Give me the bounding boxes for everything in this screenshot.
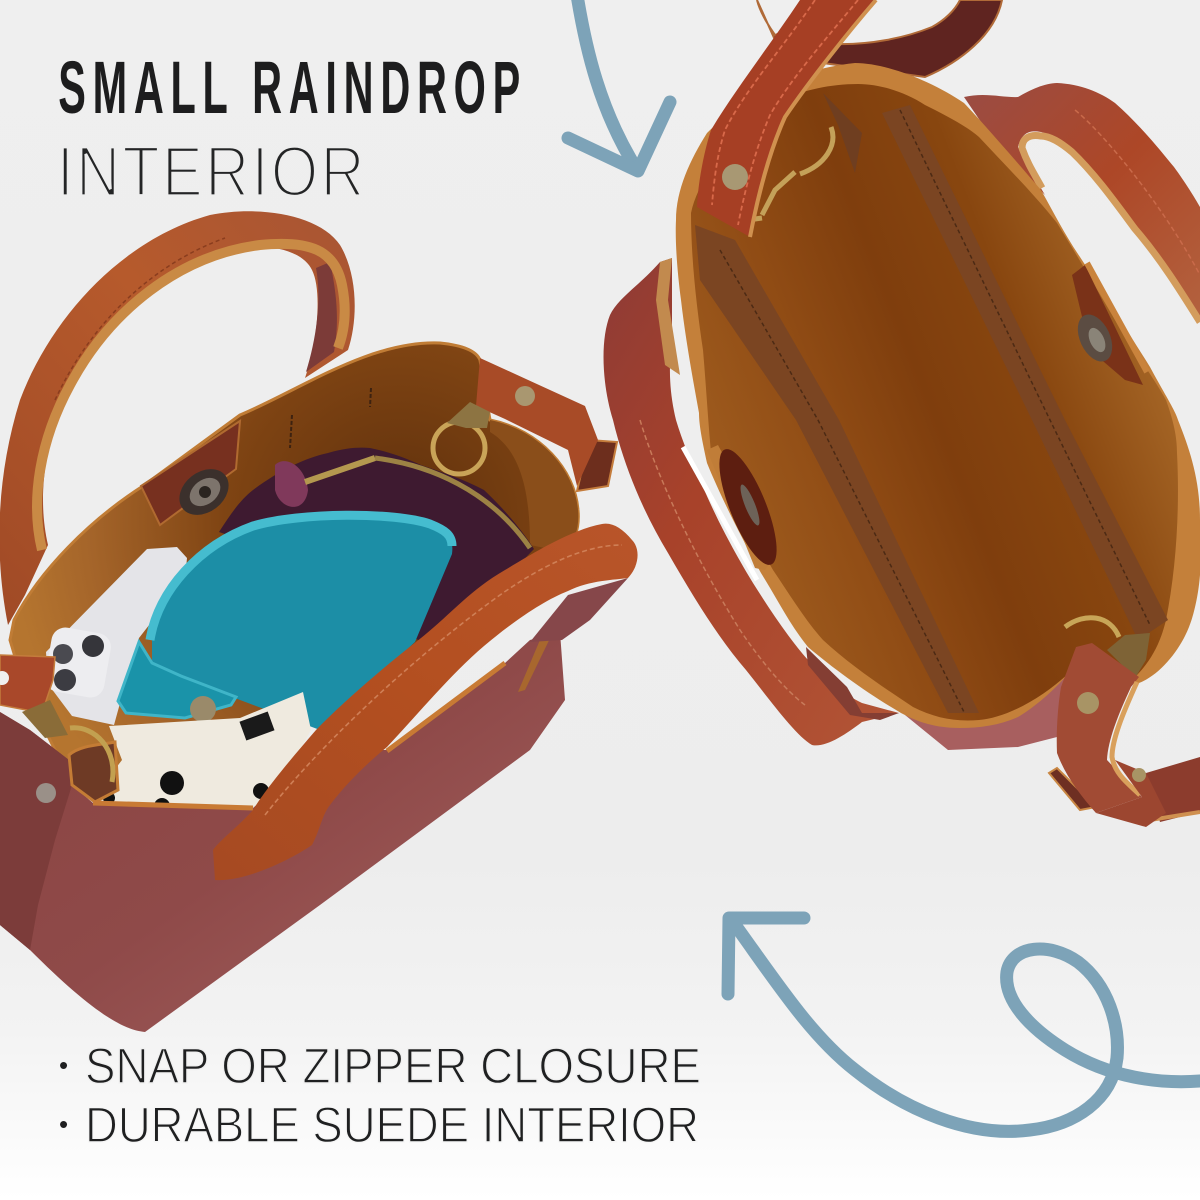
- front handle: [213, 524, 638, 880]
- far handle: [0, 211, 355, 625]
- bottom clasp: [1065, 618, 1150, 678]
- top clasp: [748, 127, 833, 220]
- left strap with clasp: [0, 655, 113, 803]
- left handle: [604, 258, 899, 745]
- far strap with rivet: [476, 358, 617, 491]
- title: SMALL RAINDROP: [58, 46, 520, 129]
- inner flap near clasp: [823, 93, 862, 173]
- bullet list: DURABLE SUEDE INTERIOR: [85, 1097, 699, 1153]
- arrow: top pointing to right bag: [568, 0, 670, 171]
- left bag: [0, 211, 638, 1032]
- suede stitch marks: [290, 388, 371, 448]
- right bag: [604, 0, 1200, 827]
- rim fold inside corner: [69, 742, 118, 802]
- side tab: [518, 628, 555, 692]
- interior outer rim: [676, 63, 1200, 728]
- snap tab right: [1071, 263, 1147, 385]
- top strap with rivet: [697, 0, 876, 237]
- front rim edge: [93, 663, 505, 808]
- back strap arc: [757, 0, 1002, 77]
- bullet list: SNAP OR ZIPPER CLOSURE: [85, 1038, 701, 1094]
- snap tab left: [707, 443, 788, 571]
- title: [57, 46, 520, 212]
- bullet list: •: [59, 1109, 68, 1139]
- handle inner surface: [530, 578, 628, 642]
- far right suede wall: [490, 420, 578, 552]
- brass ring: [433, 402, 490, 474]
- snap tab: [141, 421, 240, 525]
- teal pouch: [118, 512, 452, 730]
- right handle: [964, 83, 1200, 322]
- left seam strip: [695, 225, 979, 713]
- interior back wall: [10, 343, 578, 790]
- bottom strap loop and belt: [1049, 643, 1200, 827]
- arrow: bottom looping arrow pointing to right bag: [728, 918, 1200, 1131]
- right seam strip: [882, 105, 1168, 640]
- bullet list: •: [59, 1050, 68, 1080]
- bullet list: [59, 1038, 701, 1153]
- phone: [43, 547, 187, 725]
- title: INTERIOR: [57, 133, 365, 212]
- side panel: [0, 712, 72, 950]
- bag underside: [905, 670, 1075, 750]
- plum zipper pouch: [219, 448, 534, 642]
- bag body: [0, 632, 565, 1032]
- teal flap with snap: [118, 642, 236, 722]
- polka dot cloth: [93, 692, 311, 816]
- suede floor: [691, 84, 1178, 720]
